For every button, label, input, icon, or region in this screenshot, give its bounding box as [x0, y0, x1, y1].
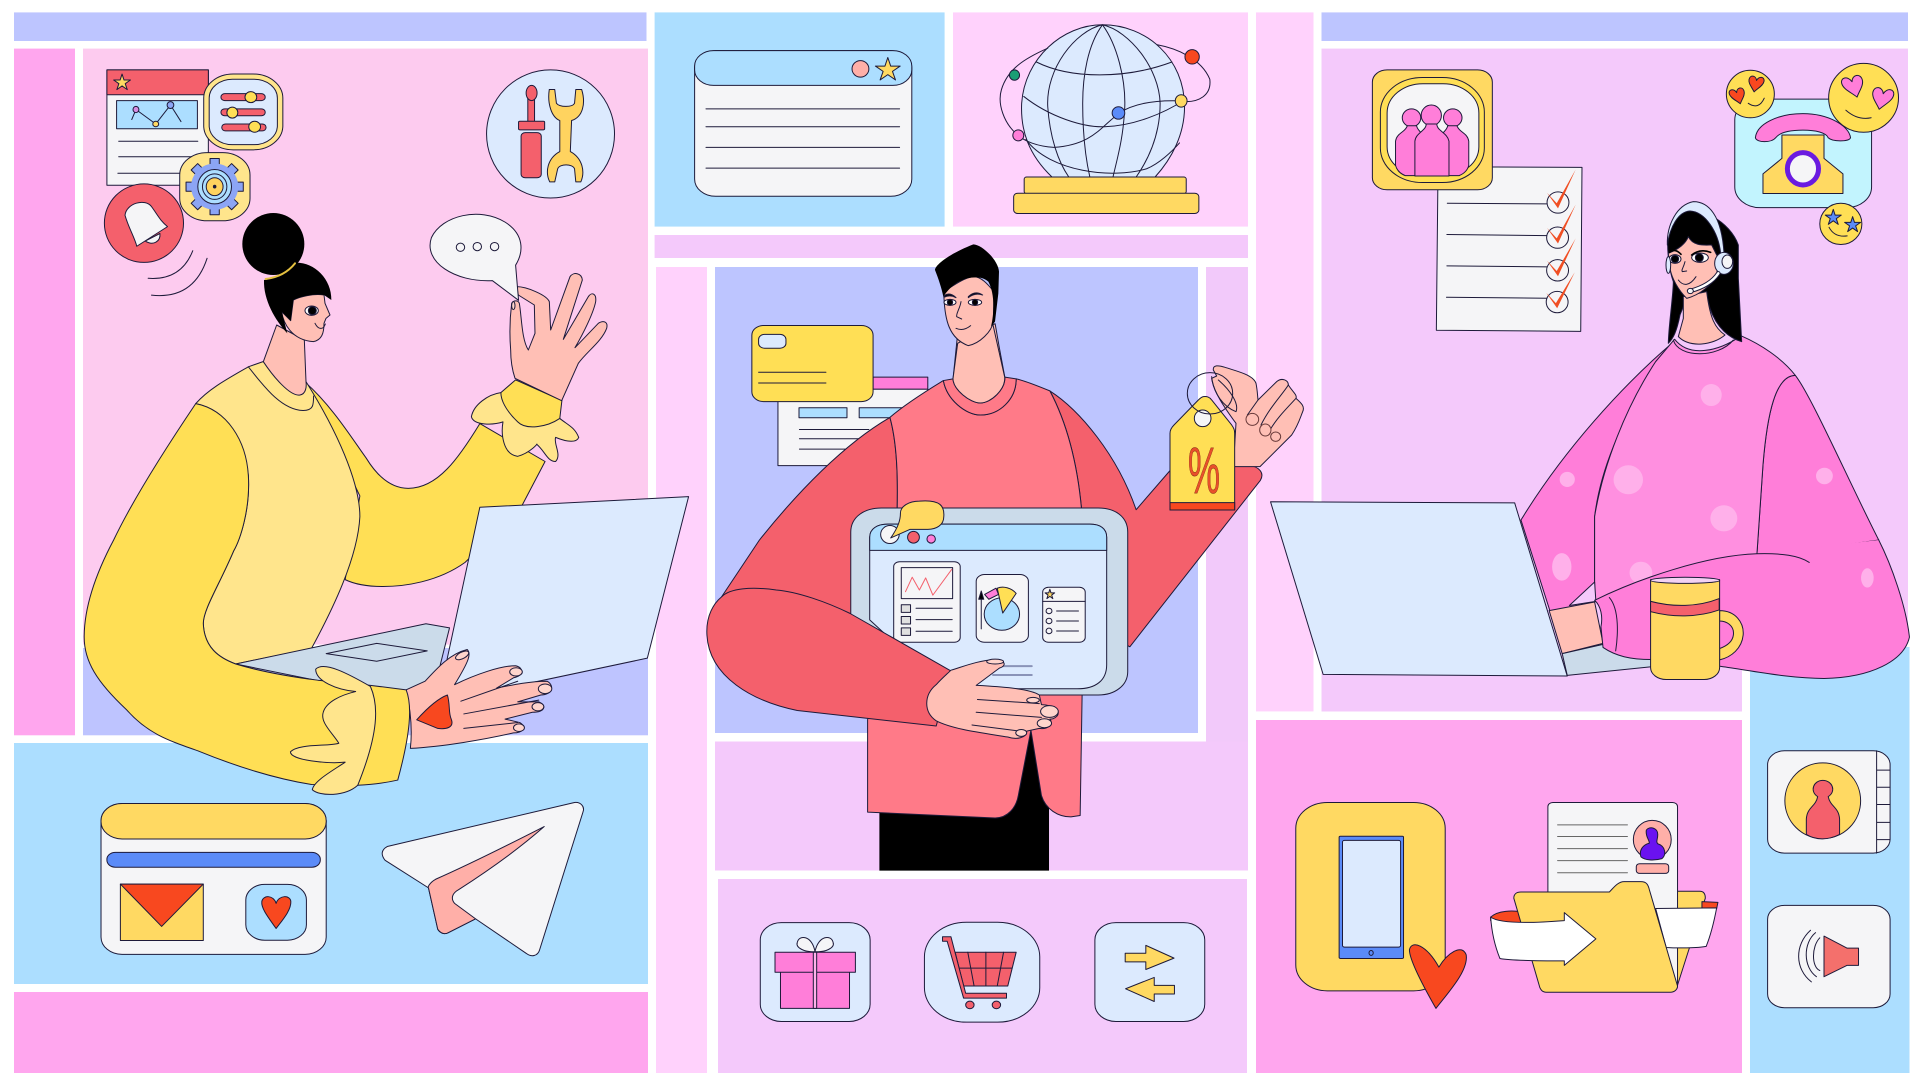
microphone arm — [1690, 273, 1718, 291]
tag hole — [1194, 410, 1211, 427]
torso — [196, 362, 360, 664]
hair — [935, 244, 999, 327]
tag ring — [1187, 373, 1233, 414]
emoji: star eyes — [1820, 203, 1862, 245]
icon: gear — [180, 153, 250, 221]
right ear cup — [1715, 252, 1733, 274]
neck base — [953, 324, 1005, 403]
right column illustrations — [1271, 63, 1909, 1008]
sleeve left — [1521, 341, 1675, 612]
sweater dots — [1552, 384, 1833, 584]
icon: gift — [760, 923, 870, 1021]
hair — [264, 263, 331, 333]
figure: man in red sweater body — [707, 324, 1262, 871]
headband — [1667, 202, 1724, 253]
icon: dashboard document — [107, 70, 208, 185]
keyboard — [1562, 644, 1651, 675]
percent sign on tag: % — [1188, 435, 1220, 508]
icon: phone with heart — [1296, 802, 1466, 1008]
neck — [263, 325, 306, 395]
ear cup inner — [1722, 255, 1733, 268]
hair band — [266, 263, 295, 279]
upper arm left — [722, 417, 897, 620]
figure: woman with headset body — [1271, 336, 1909, 680]
lower cuff ruffle — [290, 666, 376, 794]
right eye — [968, 299, 982, 305]
laptop gap — [1569, 582, 1596, 605]
pupil — [308, 307, 316, 315]
icon: bell — [104, 184, 207, 296]
price tag — [1170, 396, 1235, 510]
icon: browser window — [695, 51, 912, 196]
sleeve outlines — [1595, 540, 1909, 678]
raised arm sleeve — [1050, 391, 1262, 647]
trackpad — [326, 643, 427, 661]
face — [943, 277, 994, 346]
icon: telephone with emojis — [1726, 63, 1899, 245]
icon: speaker — [1768, 905, 1890, 1008]
left ear cup — [1666, 257, 1671, 273]
face — [282, 295, 330, 342]
nose and mouth — [956, 302, 971, 330]
mug — [1651, 577, 1743, 680]
neck — [1678, 292, 1725, 344]
icon: envelope card — [101, 803, 326, 954]
outer collar line — [248, 367, 314, 411]
left eye — [1669, 255, 1681, 263]
hand — [1212, 366, 1303, 467]
long hair — [1668, 210, 1742, 343]
woman in yellow: head — [242, 213, 331, 395]
tablet — [851, 501, 1128, 695]
microphone arm highlight — [1690, 273, 1718, 291]
document checklist — [1436, 167, 1582, 331]
center column illustrations — [695, 25, 1262, 1022]
icon: shopping cart — [924, 922, 1040, 1022]
man: hand with price tag — [1170, 366, 1303, 510]
microphone — [1687, 288, 1693, 294]
torso — [1595, 336, 1795, 601]
neck — [953, 323, 1005, 403]
lower arm sleeve — [84, 404, 410, 785]
icon: exchange arrows — [1095, 923, 1205, 1021]
left column illustrations — [84, 70, 689, 956]
left pupil — [1671, 255, 1679, 263]
forearm sleeve — [707, 588, 951, 726]
laptop keyboard — [236, 624, 450, 692]
sleeve dot — [1861, 568, 1874, 588]
icon: tools — [487, 70, 615, 198]
right pupil — [972, 299, 978, 305]
tag base strip — [1170, 503, 1235, 510]
left pupil — [947, 299, 953, 305]
holding hand — [927, 659, 1058, 738]
face — [1668, 237, 1718, 298]
emoji: pink hearts — [1829, 63, 1899, 132]
icon: contact book — [1768, 751, 1890, 853]
collar — [1673, 340, 1733, 354]
icon: paper plane — [382, 802, 583, 956]
collar — [943, 377, 1016, 415]
eyebrows, nose and smile — [1678, 262, 1696, 284]
raised arm sleeve — [305, 382, 545, 587]
icon: sliders — [204, 74, 283, 150]
right pupil — [1695, 254, 1703, 262]
woman in yellow: raised hand — [510, 274, 607, 401]
laptop — [1271, 502, 1567, 676]
fingernails — [1246, 413, 1281, 441]
trousers — [879, 723, 1049, 871]
raised cuff ruffle — [471, 393, 579, 461]
emoji: red hearts — [1726, 70, 1774, 118]
eye — [305, 306, 318, 315]
icon: folder with resume — [1491, 802, 1718, 992]
wrist — [1549, 602, 1603, 654]
forearm sleeve — [1595, 540, 1909, 678]
icon: globe — [1000, 25, 1210, 214]
raised cuff — [501, 380, 562, 427]
woman with headset: head — [1666, 202, 1742, 354]
smile — [315, 323, 325, 328]
left eye — [944, 299, 956, 305]
figure: woman in yellow sweater body — [84, 362, 689, 794]
laptop screen — [438, 497, 689, 703]
lower hand — [406, 649, 552, 748]
icon: team — [1372, 70, 1492, 190]
right eye — [1692, 253, 1708, 262]
sleeve right — [1757, 375, 1879, 558]
eyebrows — [944, 293, 983, 298]
speech bubble — [430, 214, 521, 300]
hair bun — [242, 213, 304, 275]
fingers — [1212, 377, 1296, 430]
icon: credit card — [752, 325, 873, 402]
man: head — [935, 244, 1005, 403]
document behind card — [778, 377, 928, 466]
torso — [868, 379, 1084, 818]
eyebrow strokes — [1669, 250, 1711, 255]
